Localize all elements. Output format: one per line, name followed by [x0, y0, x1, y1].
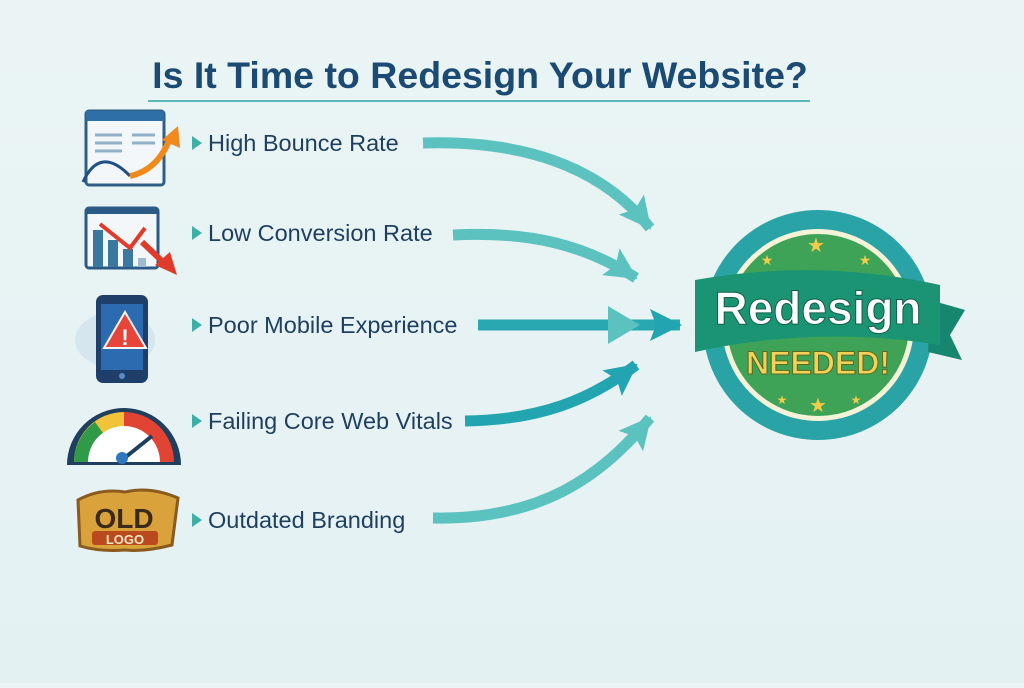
- arrows: [423, 143, 680, 518]
- icon: old logo badge: [78, 490, 178, 550]
- label: High Bounce Rate: High Bounce Rate: [208, 130, 399, 156]
- icon: bounce rate browser: [83, 111, 180, 185]
- badge: Redesign Needed: [695, 210, 965, 440]
- badge: Redesign Needed: ★: [809, 395, 827, 417]
- badge: Redesign Needed: Redesign: [714, 282, 922, 334]
- badge: Redesign Needed: ★: [761, 252, 773, 268]
- label: Low Conversion Rate: Low Conversion Rate: [208, 220, 433, 246]
- icon: old logo badge: OLD: [94, 503, 154, 534]
- icon: mobile warning: [75, 295, 155, 383]
- icon: conversion chart: [86, 208, 177, 275]
- title: Is It Time to Redesign Your Website?: [152, 54, 808, 96]
- badge: Redesign Needed: NEEDED!: [746, 345, 890, 381]
- label: Failing Core Web Vitals: Failing Core Web Vitals: [208, 408, 453, 434]
- badge: Redesign Needed: ★: [777, 393, 787, 407]
- label: Outdated Branding: Outdated Branding: [208, 507, 405, 533]
- label: Poor Mobile Experience: Poor Mobile Experience: [208, 312, 458, 338]
- badge: Redesign Needed: ★: [859, 252, 871, 268]
- icon: mobile warning: !: [121, 325, 129, 350]
- badge: Redesign Needed: ★: [807, 235, 825, 257]
- icon: old logo badge: LOGO: [106, 532, 144, 547]
- icon: gauge: [67, 408, 181, 465]
- badge: Redesign Needed: ★: [851, 393, 861, 407]
